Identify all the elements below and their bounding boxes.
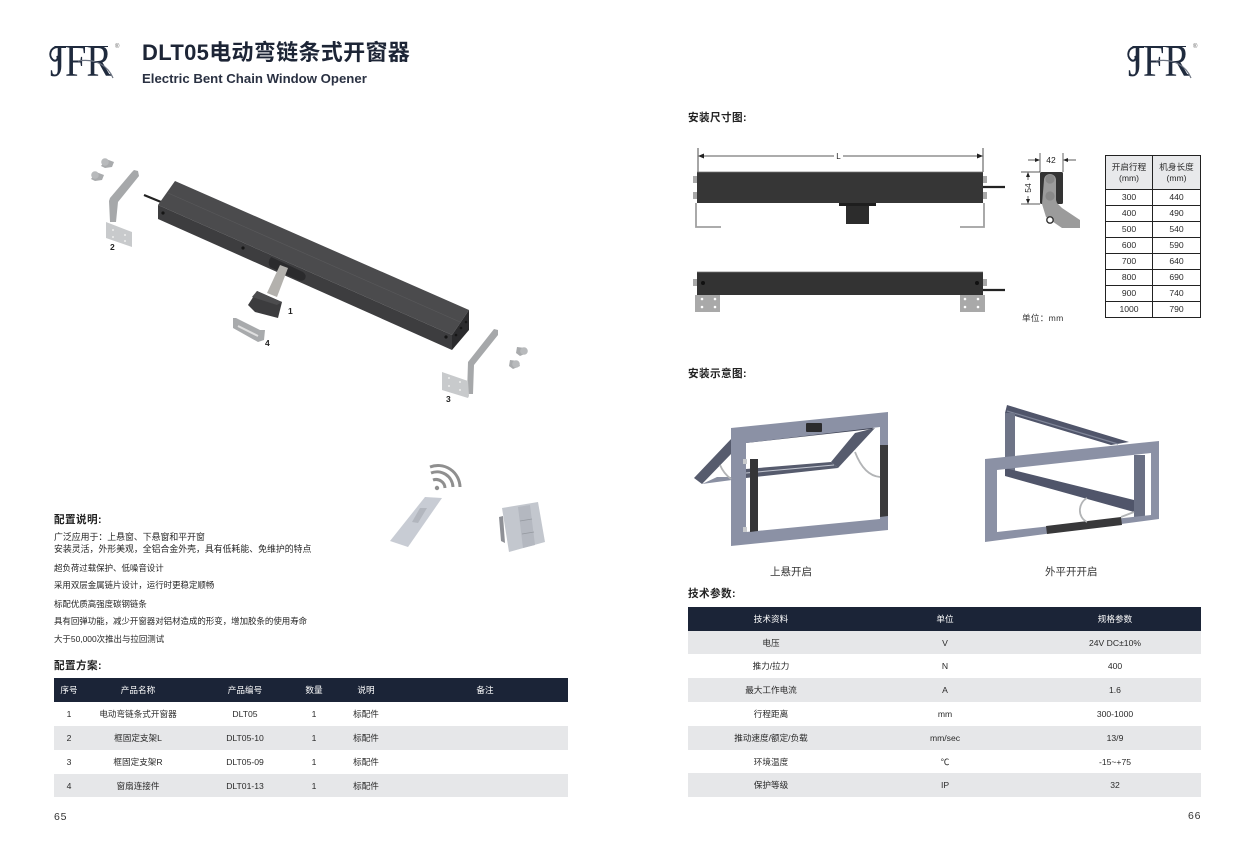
caption: side-opening: 外平开开启 (1045, 566, 1098, 578)
table: technical parameters: mm (938, 709, 952, 719)
table: stroke and body length: 900 (1122, 288, 1136, 298)
table: stroke and body length: 440 (1169, 192, 1184, 202)
part numbers: 3 (446, 394, 451, 404)
table: stroke and body length: 540 (1169, 224, 1184, 234)
unit note: 单位：mm (1022, 313, 1064, 323)
text block: feature list: 大于50,000次推出与拉回测试 (54, 634, 164, 644)
table: technical parameters: ℃ (941, 756, 949, 766)
table: technical parameters: 技术资料 (754, 614, 788, 624)
table: configuration plan: 2 (67, 733, 71, 743)
icon: connector 4 (233, 318, 265, 342)
part numbers: 4 (265, 338, 270, 348)
table: stroke and body length: 790 (1169, 304, 1184, 314)
text block: feature list: 采用双层金属链片设计，运行时更稳定顺畅 (54, 580, 214, 590)
logo right: ® (1193, 43, 1198, 50)
table: stroke and body length: 机身长度 (1159, 162, 1194, 172)
table: technical parameters: 300-1000 (1097, 709, 1133, 719)
table: configuration plan: 备注 (476, 685, 494, 695)
table: configuration plan (54, 678, 568, 797)
table: stroke and body length: (mm) (1119, 172, 1139, 182)
table: configuration plan: 标配件 (353, 709, 379, 719)
logo left: ® (115, 43, 120, 50)
heading: technical parameters: 技术参数: (688, 588, 736, 600)
frame top lock (806, 423, 822, 432)
caption: top-hung: 上悬开启 (770, 566, 812, 578)
table: configuration plan: 标配件 (353, 780, 379, 790)
back sash (1005, 405, 1129, 445)
icon: screws top left (91, 158, 114, 181)
table: technical parameters: 规格参数 (1098, 614, 1132, 624)
front frame (985, 441, 1159, 542)
table: technical parameters: 1.6 (1109, 685, 1121, 695)
dimension drawing: side view: 54 (1023, 183, 1033, 193)
table: technical parameters: mm/sec (930, 733, 960, 743)
heading: installation illustration: 安装示意图: (688, 368, 747, 380)
dimension drawing: bottom view (693, 272, 1005, 312)
icon: remote control (390, 497, 442, 547)
table: technical parameters: 24V DC±10% (1089, 638, 1141, 648)
table: technical parameters: 单位 (936, 614, 954, 624)
actuators (750, 459, 758, 532)
actuator (1046, 517, 1122, 534)
table: configuration plan: DLT05-10 (226, 733, 264, 743)
table: technical parameters: 保护等级 (754, 780, 788, 790)
title: DLT05电动弯链条式开窗器 (142, 40, 410, 65)
table: configuration plan: 序号 (60, 685, 78, 695)
part numbers: 2 (110, 242, 115, 252)
table: stroke and body length: 1000 (1119, 304, 1139, 314)
table: technical parameters: IP (941, 780, 949, 790)
table: configuration plan: 3 (67, 757, 71, 767)
icon: bracket 3 (442, 329, 498, 398)
table: technical parameters: 13/9 (1107, 733, 1123, 743)
dimension drawing: front view: L (836, 152, 841, 161)
chain (267, 265, 288, 297)
cable (1080, 498, 1087, 522)
table: stroke and body length: 740 (1169, 288, 1184, 298)
table: stroke and body length: 640 (1169, 256, 1184, 266)
icon: wall switch (499, 502, 545, 552)
cable (144, 195, 161, 202)
text block: feature list: 安装灵活，外形美观，全铝合金外壳，具有低耗能、免维护的特点 (54, 544, 311, 554)
part numbers: 1 (288, 306, 293, 316)
table: technical parameters: V (942, 638, 948, 648)
table: stroke and body length: 490 (1169, 208, 1184, 218)
table: configuration plan: 1 (312, 757, 316, 767)
table: configuration plan: 4 (67, 780, 71, 790)
table: stroke and body length: 800 (1122, 272, 1136, 282)
table: stroke and body length (1105, 155, 1201, 318)
table: technical parameters: 环境温度 (754, 756, 788, 766)
table: configuration plan: 1 (312, 733, 316, 743)
table: configuration plan: 标配件 (353, 733, 379, 743)
table: technical parameters: 推动速度/额定/负载 (734, 733, 808, 743)
icon: screws right (509, 347, 528, 369)
exploded product diagram (91, 158, 528, 404)
table: stroke and body length: 500 (1122, 224, 1136, 234)
table: technical parameters: 推力/拉力 (753, 661, 789, 671)
page number 65: 65 (54, 811, 67, 823)
table: configuration plan: 产品名称 (121, 685, 155, 695)
table: configuration plan: DLT05 (232, 709, 258, 719)
text block: feature list: 具有回弹功能，减少开窗器对铝材造成的形变，增加胶条的使用寿命 (54, 616, 307, 626)
chain block (248, 291, 282, 318)
frame (731, 412, 888, 546)
table: stroke and body length: (mm) (1166, 172, 1187, 182)
icon: wireless signal (430, 464, 462, 490)
table: configuration plan: 1 (312, 780, 316, 790)
table: technical parameters (688, 607, 1201, 797)
table: stroke and body length: 开启行程 (1112, 162, 1146, 172)
table: stroke and body length: 300 (1122, 192, 1136, 202)
table: stroke and body length: 600 (1122, 240, 1136, 250)
dimension drawing: side view (1021, 153, 1080, 228)
table: configuration plan: 标配件 (353, 757, 379, 767)
illustration: top-hung window (694, 412, 888, 546)
illustration: side-opening window (985, 405, 1159, 542)
table: technical parameters: N (942, 661, 948, 671)
heading: configuration notes: 配置说明: (54, 514, 102, 526)
slider plate (269, 257, 306, 281)
dimension drawing: side view: 42 (1046, 155, 1056, 165)
table: technical parameters: 最大工作电流 (745, 685, 797, 695)
cables (855, 452, 880, 477)
table: stroke and body length: 590 (1169, 240, 1184, 250)
table: technical parameters: A (942, 685, 948, 695)
text block: feature list: 超负荷过载保护、低噪音设计 (54, 563, 164, 573)
text block: feature list: 标配优质高强度碳钢链条 (54, 599, 147, 609)
table: technical parameters: 32 (1110, 780, 1120, 790)
mounting clips (743, 459, 747, 532)
table: technical parameters: -15~+75 (1099, 756, 1131, 766)
actuator body (158, 181, 469, 350)
table: technical parameters: 电压 (762, 638, 780, 648)
table: configuration plan: DLT01-13 (226, 780, 264, 790)
table: configuration plan: 电动弯链条式开窗器 (99, 709, 177, 719)
table: stroke and body length: 690 (1169, 272, 1184, 282)
dimension drawing: front view (693, 148, 1005, 228)
heading: installation dimensions: 安装尺寸图: (688, 112, 747, 124)
text block: feature list (54, 532, 311, 644)
icon: bracket 2 (106, 170, 139, 247)
heading: configuration plan: 配置方案: (54, 660, 102, 672)
table: configuration plan: 1 (312, 709, 316, 719)
text block: feature list: 广泛应用于：上悬窗、下悬窗和平开窗 (54, 532, 205, 542)
table: technical parameters: 400 (1108, 661, 1122, 671)
logo right: JFR (1128, 35, 1190, 86)
open sash (694, 426, 875, 484)
table: configuration plan: 产品编号 (228, 685, 262, 695)
table: configuration plan: 说明 (357, 685, 375, 695)
table: configuration plan: 数量 (305, 685, 323, 695)
table: configuration plan: 1 (67, 709, 71, 719)
table: configuration plan: 窗扇连接件 (116, 780, 159, 790)
table: configuration plan: DLT05-09 (226, 757, 264, 767)
table: configuration plan: 框固定支架L (114, 733, 162, 743)
table: stroke and body length: 400 (1122, 208, 1136, 218)
subtitle: Electric Bent Chain Window Opener (142, 71, 367, 86)
logo left: JFR (50, 35, 112, 86)
part numbers (110, 242, 451, 404)
page number 66: 66 (1188, 810, 1201, 822)
table: technical parameters: 行程距离 (754, 709, 788, 719)
table: configuration plan: 框固定支架R (113, 757, 163, 767)
table: stroke and body length: 700 (1122, 256, 1136, 266)
